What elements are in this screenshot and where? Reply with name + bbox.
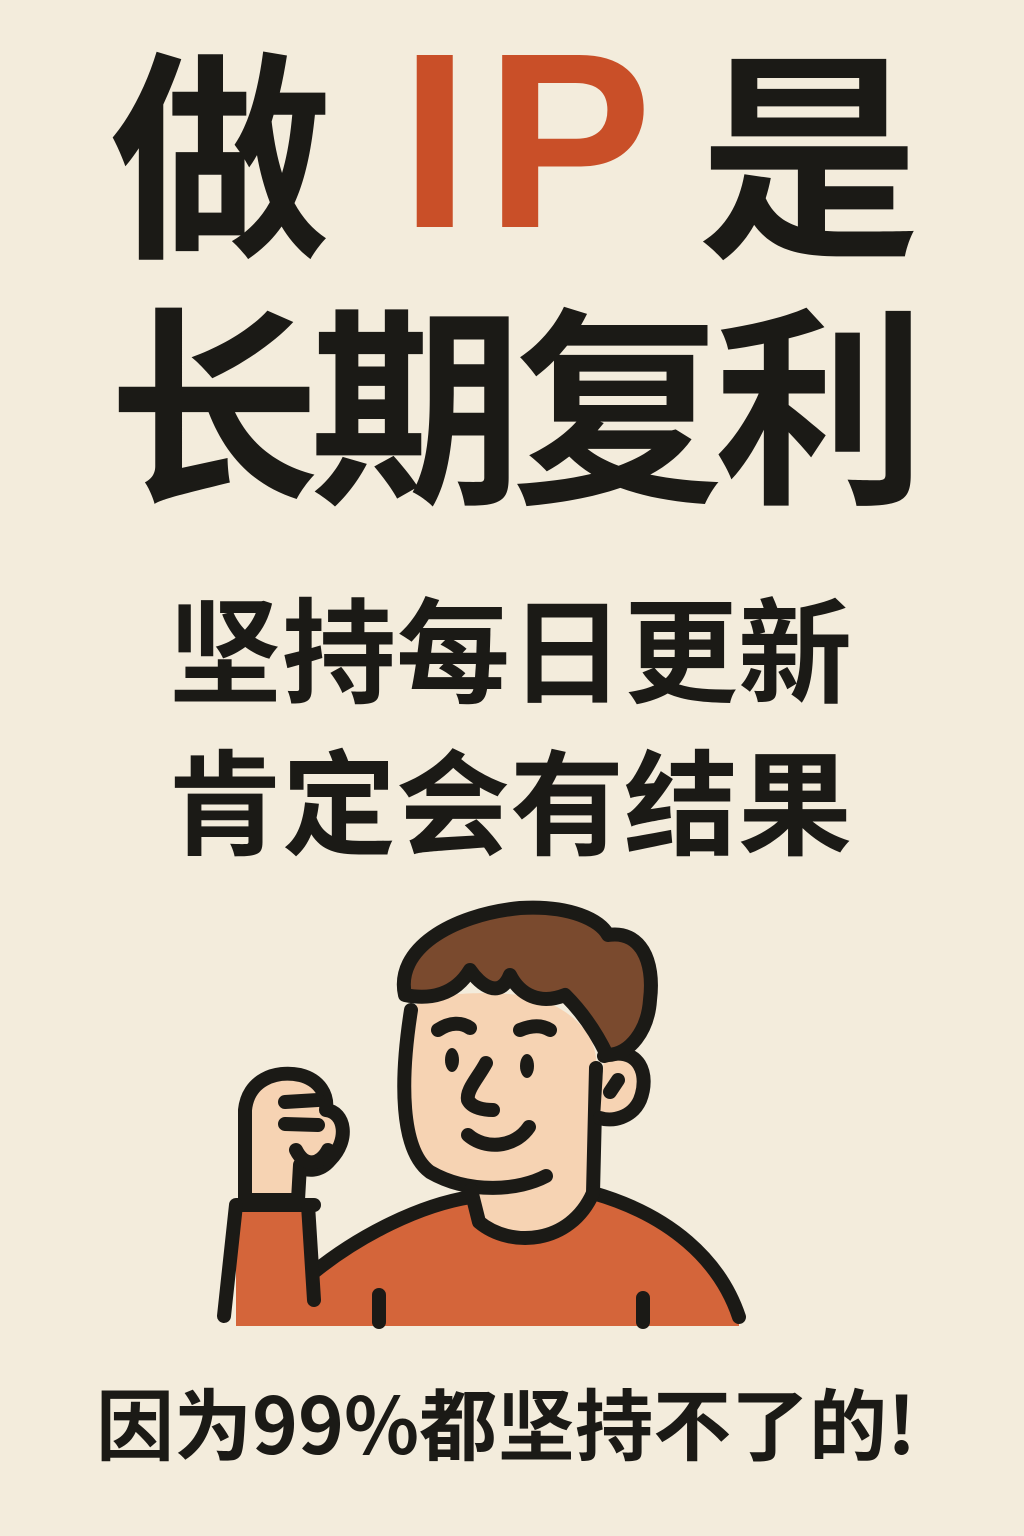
subtitle line 1: 坚持每日更新 [168, 562, 852, 727]
shirt [236, 1193, 739, 1326]
raised fist arm [224, 1074, 343, 1326]
eyes [445, 1048, 534, 1078]
title line 2: 长期复利 [108, 242, 916, 549]
subtitle line 2: 肯定会有结果 [168, 714, 852, 879]
title highlight: IP: IP [400, 1, 668, 280]
title line 1 [110, 0, 920, 304]
eyebrows [438, 1024, 550, 1030]
hair [404, 908, 651, 1055]
smile [468, 1127, 529, 1145]
ear [600, 1054, 644, 1119]
nose [468, 1063, 493, 1110]
face and neck [404, 993, 596, 1238]
bottom tagline: 因为99%都坚持不了的! [96, 1365, 916, 1477]
